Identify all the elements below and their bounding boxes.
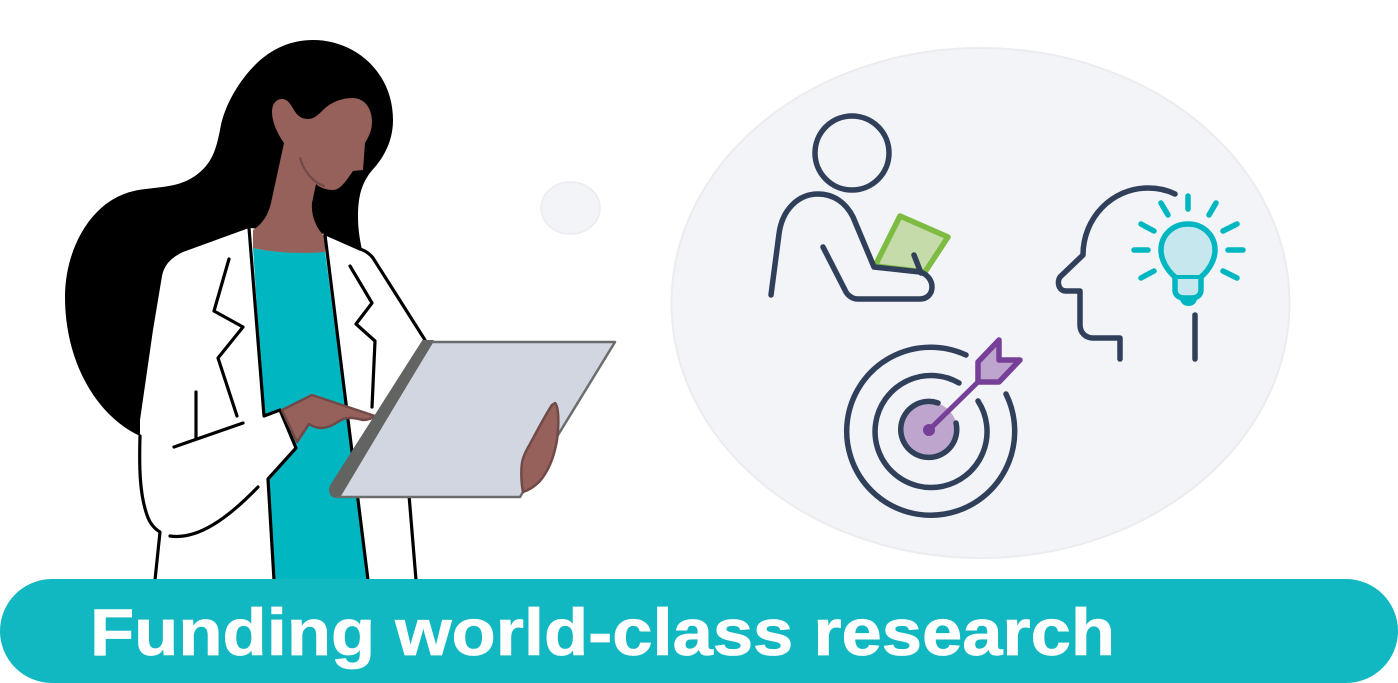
skin: face and neck [253, 98, 372, 253]
target centre [901, 402, 957, 458]
hair [65, 40, 393, 436]
shirt [253, 248, 368, 580]
banner [0, 579, 1398, 683]
coat front edges [249, 228, 368, 580]
notebook [875, 216, 948, 272]
icon: head with lightbulb [1058, 188, 1243, 359]
coat outlines [140, 234, 425, 580]
pointing hand [282, 395, 375, 442]
tablet spine [330, 341, 433, 497]
icon: person with notebook [771, 116, 948, 299]
small thought bubble [541, 182, 600, 234]
target rings [847, 347, 1015, 515]
person outline [771, 116, 932, 299]
banner title: Funding world-class research [90, 595, 1115, 669]
large thought bubble [672, 48, 1290, 558]
holding hand [521, 403, 558, 492]
icon: target with arrow [847, 340, 1020, 515]
lightbulb [1161, 224, 1215, 298]
tablet [330, 341, 615, 497]
neck shadow line [300, 158, 324, 186]
tablet screen [338, 342, 615, 497]
illustration: researcher with tablet [65, 40, 615, 580]
head outline [1058, 188, 1195, 359]
coat [140, 228, 425, 580]
light rays [1134, 196, 1243, 278]
arrow [924, 340, 1020, 435]
